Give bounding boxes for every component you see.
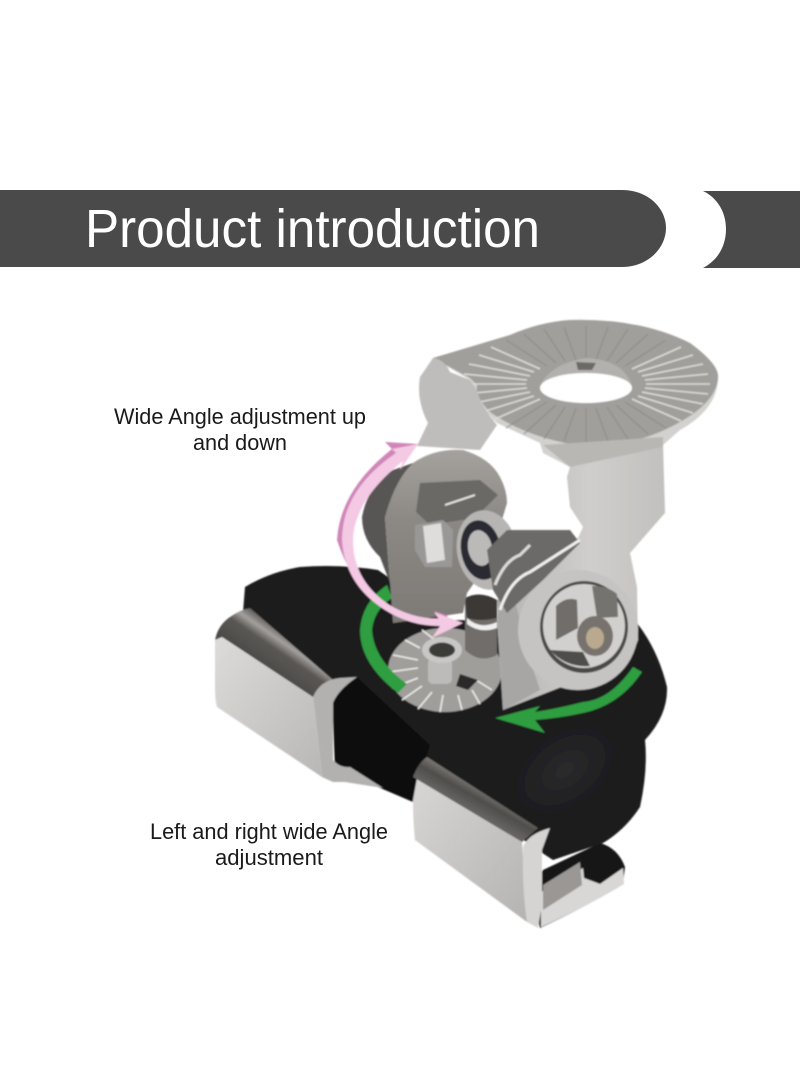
label: left and right adjustment: adjustment <box>215 845 323 870</box>
green rotation arrow right <box>495 667 642 733</box>
knurled post <box>465 594 497 659</box>
left clip <box>215 608 383 788</box>
black rubber base <box>243 566 667 860</box>
bolt assembly <box>415 480 580 613</box>
left plate <box>385 450 507 623</box>
bracket lower left strip <box>497 590 540 710</box>
washer collar <box>540 358 632 386</box>
base reflection <box>491 702 639 838</box>
hex screw <box>540 581 628 673</box>
center slot <box>332 677 430 802</box>
label: left and right adjustment <box>150 819 388 870</box>
lower tab <box>530 843 625 928</box>
label: up and down adjustment <box>114 404 366 455</box>
washer tongue <box>543 437 663 467</box>
upper left bracket arm <box>417 358 497 450</box>
green rotation arrow left <box>360 585 407 693</box>
main bracket <box>497 443 665 710</box>
serrated base washer <box>388 628 502 712</box>
label: up and down adjustment: Wide Angle adjustment up <box>114 404 366 429</box>
title banner <box>0 190 666 267</box>
product: stainless mount <box>215 320 718 928</box>
title text: Product introduction <box>85 199 540 259</box>
upper washer rim <box>433 320 718 467</box>
upper serrated washer <box>433 320 718 447</box>
pink adjustment arrow <box>337 442 463 638</box>
washer hole <box>540 373 632 403</box>
label: up and down adjustment: and down <box>193 430 287 455</box>
screw washer <box>518 570 638 690</box>
left plate rim <box>362 463 413 583</box>
label: left and right adjustment: Left and right wide Angle <box>150 819 388 844</box>
right clip <box>413 757 550 928</box>
banner right segment <box>703 191 800 268</box>
